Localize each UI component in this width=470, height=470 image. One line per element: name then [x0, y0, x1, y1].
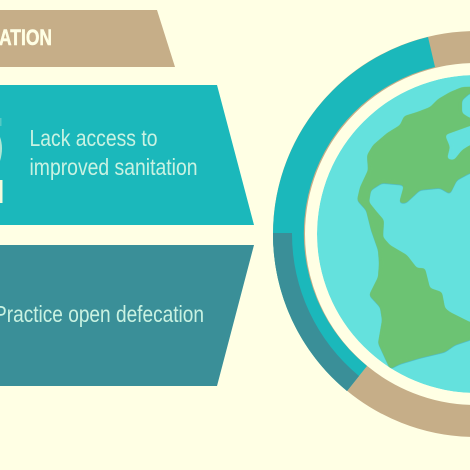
text: open defecation: Practice open defecation — [0, 301, 204, 327]
globe — [317, 75, 470, 393]
land: bay — [446, 126, 470, 160]
ring: teal segment — [273, 37, 435, 391]
chart: ring around globe — [273, 37, 470, 421]
panel: practice open defecation — [0, 245, 254, 386]
heading text: ATION — [0, 25, 52, 50]
ocean — [317, 75, 470, 393]
ring: dark teal segment — [273, 233, 359, 391]
text: lack access: Lack access to — [30, 125, 158, 151]
land: continents — [357, 86, 470, 369]
land: shoreline shadow — [357, 87, 470, 370]
text: lack access: improved sanitation — [30, 154, 198, 180]
panel: heading banner — [0, 10, 175, 67]
panel: lack access to improved sanitation — [0, 85, 254, 225]
ring: tan segment — [289, 47, 470, 421]
clipped number fragment — [0, 118, 2, 203]
